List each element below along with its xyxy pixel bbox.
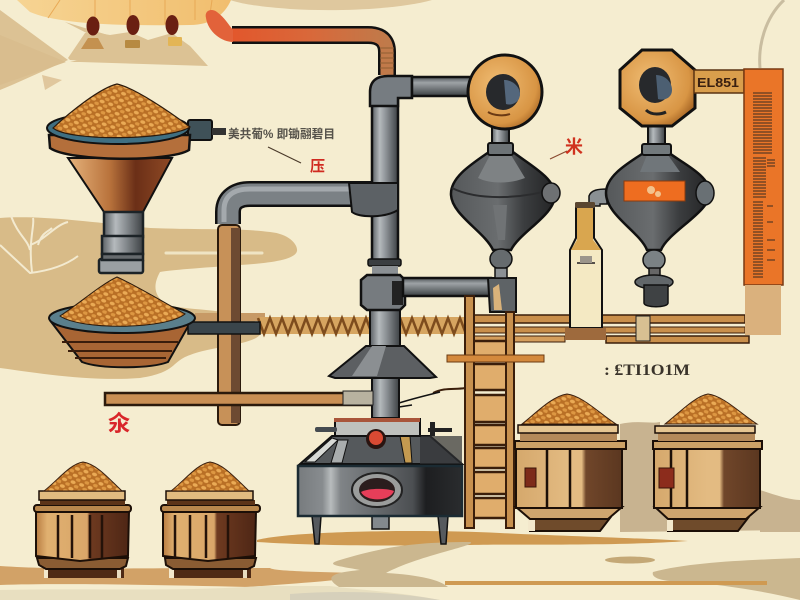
base xyxy=(37,558,128,569)
upper grain hopper xyxy=(47,84,226,273)
ladder cross shelves xyxy=(447,355,544,362)
legs xyxy=(44,565,124,578)
hopper grain xyxy=(53,84,190,138)
bowl rod xyxy=(188,322,260,334)
gauge neck xyxy=(492,125,509,145)
red mark with leader line near hopper xyxy=(268,147,325,175)
grain xyxy=(522,394,616,424)
orange measuring panel xyxy=(694,0,784,335)
side nub xyxy=(542,183,560,203)
gauge xyxy=(620,50,695,126)
junction block xyxy=(361,275,405,310)
horizontal pipe to first condenser xyxy=(403,278,516,312)
hopper cylindrical outlet xyxy=(99,212,143,273)
vertical wooden post and horizontal beam xyxy=(105,225,375,425)
grain barrel 1 xyxy=(34,462,131,578)
support bar xyxy=(694,70,744,93)
body xyxy=(606,152,710,250)
wood base xyxy=(745,285,781,335)
collar xyxy=(642,144,671,155)
red mark with leader line near hopper: 压 xyxy=(310,158,325,175)
stove upper slant xyxy=(300,436,462,464)
lower nozzle xyxy=(635,250,673,307)
stove body xyxy=(298,466,462,516)
vessel body xyxy=(451,152,555,250)
vessel collar xyxy=(488,143,513,155)
body xyxy=(36,511,129,561)
hopper band xyxy=(49,135,190,159)
central vertical gray pipe xyxy=(349,76,472,346)
label: hopper caption: 美共葡% 即锄翮碧目 xyxy=(228,126,335,141)
scale ticks xyxy=(753,93,775,277)
gauge xyxy=(468,55,542,129)
grain barrel 2 xyxy=(161,462,260,578)
still neck xyxy=(343,378,440,418)
stove window xyxy=(352,473,402,507)
lower grain bowl xyxy=(49,277,260,367)
bottle xyxy=(565,202,606,340)
wooden track rails xyxy=(473,315,749,343)
horizontal to first gauge xyxy=(412,77,472,96)
hopper rim xyxy=(47,112,189,144)
stove legs xyxy=(312,516,448,544)
grain barrel 4 xyxy=(653,394,762,531)
collar xyxy=(368,259,401,266)
still hood cone xyxy=(329,346,436,378)
red mark under beam: 氽 xyxy=(108,411,130,436)
hopper side connector xyxy=(188,120,226,140)
red mark with leader line near condenser: 米 xyxy=(565,137,583,157)
gray elbow pipe left xyxy=(224,189,382,224)
bowl body xyxy=(52,323,190,367)
spout to bottle xyxy=(589,189,607,206)
pipe junction xyxy=(349,183,398,216)
stove top plate xyxy=(335,419,420,436)
top elbow xyxy=(370,76,412,106)
screw conveyor spring xyxy=(195,313,468,334)
grain xyxy=(44,462,122,491)
neck xyxy=(648,125,665,147)
band xyxy=(34,505,131,512)
chimney line xyxy=(760,0,784,68)
bowl rim xyxy=(49,303,195,333)
scale panel xyxy=(744,69,783,285)
lid xyxy=(39,491,125,500)
decorative top-left fan with tassels xyxy=(17,0,231,66)
first condenser vessel xyxy=(451,55,560,278)
orange label xyxy=(624,181,685,201)
burner stove xyxy=(298,418,462,544)
copper inlet tube xyxy=(206,10,394,75)
vessel lower neck xyxy=(490,249,512,278)
second condenser vessel xyxy=(589,50,714,307)
red mark with leader line near condenser xyxy=(550,137,583,159)
hopper cone xyxy=(68,158,172,212)
process label: : ₤TI1O1M xyxy=(604,362,690,379)
red indicator knob xyxy=(366,429,386,449)
grain barrel 3 xyxy=(515,394,626,531)
support bar: EL851 xyxy=(697,75,739,90)
ladder xyxy=(433,296,544,528)
bowl grain xyxy=(60,277,185,326)
lower pipe xyxy=(370,308,400,346)
